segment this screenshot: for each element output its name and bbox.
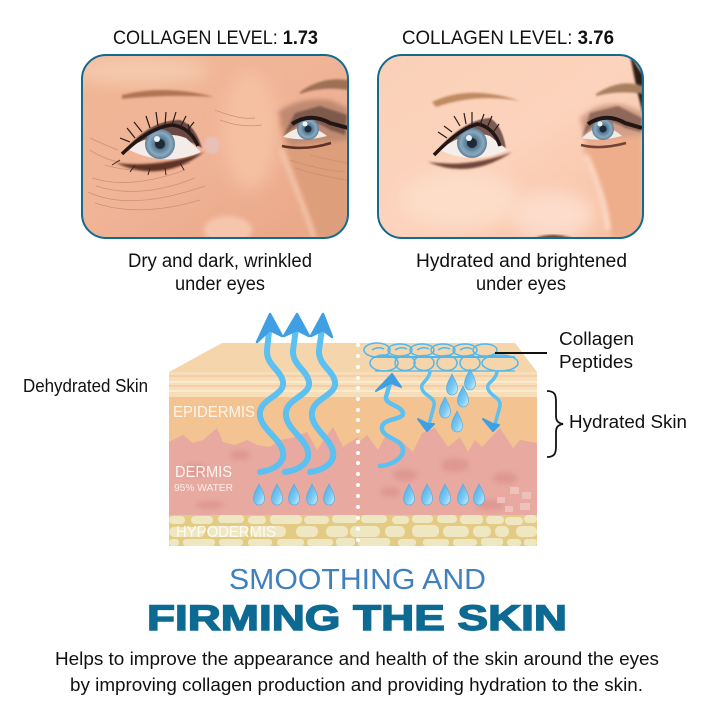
caption: after: Hydrated and brightened: [416, 251, 627, 272]
left eye: [428, 152, 512, 169]
label: collagen peptides: Peptides: [559, 351, 633, 372]
caption: after: under eyes: [476, 274, 566, 295]
caption: after: [416, 251, 627, 295]
right eye: [582, 106, 642, 138]
label: hydrated skin: Hydrated Skin: [569, 411, 687, 432]
stratum corneum layer: [169, 340, 537, 400]
label: dehydrated skin: Dehydrated Skin: [23, 376, 148, 396]
label: collagen peptides: Collagen: [559, 328, 634, 349]
body text: Helps to improve the appearance and health of the skin around the eyes: [55, 648, 659, 669]
photo panel: hydrated eye area: [378, 55, 643, 239]
dermis layer: [169, 427, 537, 516]
wrinkles: [88, 110, 347, 210]
skin cross-section diagram: [169, 314, 537, 546]
heading: firming the skin: FIRMING THE SKIN: [147, 599, 567, 638]
body text: [55, 648, 659, 695]
pointer line to peptides: [495, 352, 547, 354]
arrows: hydration in healthy skin: [376, 372, 500, 466]
dotted divider: [356, 343, 360, 542]
heading: collagen level before: COLLAGEN LEVEL: 1.73: [113, 28, 318, 49]
brows: [122, 90, 214, 99]
caption: before: Dry and dark, wrinkled: [128, 251, 312, 272]
collagen peptide rings: [364, 343, 518, 371]
arrows: water escaping dehydrated skin: [257, 314, 335, 472]
heading: smoothing and: SMOOTHING AND: [229, 564, 486, 596]
layer label: epidermis: EPIDERMIS: [173, 404, 255, 421]
layer label: hypodermis: HYPODERMIS: [176, 524, 276, 541]
right eye: [283, 106, 347, 137]
photo panel: wrinkled eye area: [70, 55, 348, 244]
caption: before: under eyes: [175, 274, 265, 295]
water drops: right: [404, 484, 484, 505]
body text: by improving collagen production and providing hydration to the skin.: [70, 674, 643, 695]
heading: collagen level after: COLLAGEN LEVEL: 3.76: [402, 28, 614, 49]
hypodermis layer: [169, 515, 537, 546]
layer label: 95% water: 95% WATER: [174, 483, 233, 494]
brace: hydrated skin: [547, 391, 563, 457]
caption: before: [128, 251, 312, 295]
brows: [432, 93, 520, 107]
epidermis layer: [169, 397, 537, 452]
shadow side of face: [278, 120, 348, 238]
layer label: dermis: DERMIS: [175, 464, 232, 481]
left eye: [116, 152, 204, 171]
label: collagen peptides: [559, 328, 634, 372]
water drops: absorbed into epidermis: [440, 369, 476, 432]
water drops: left: [254, 484, 334, 505]
